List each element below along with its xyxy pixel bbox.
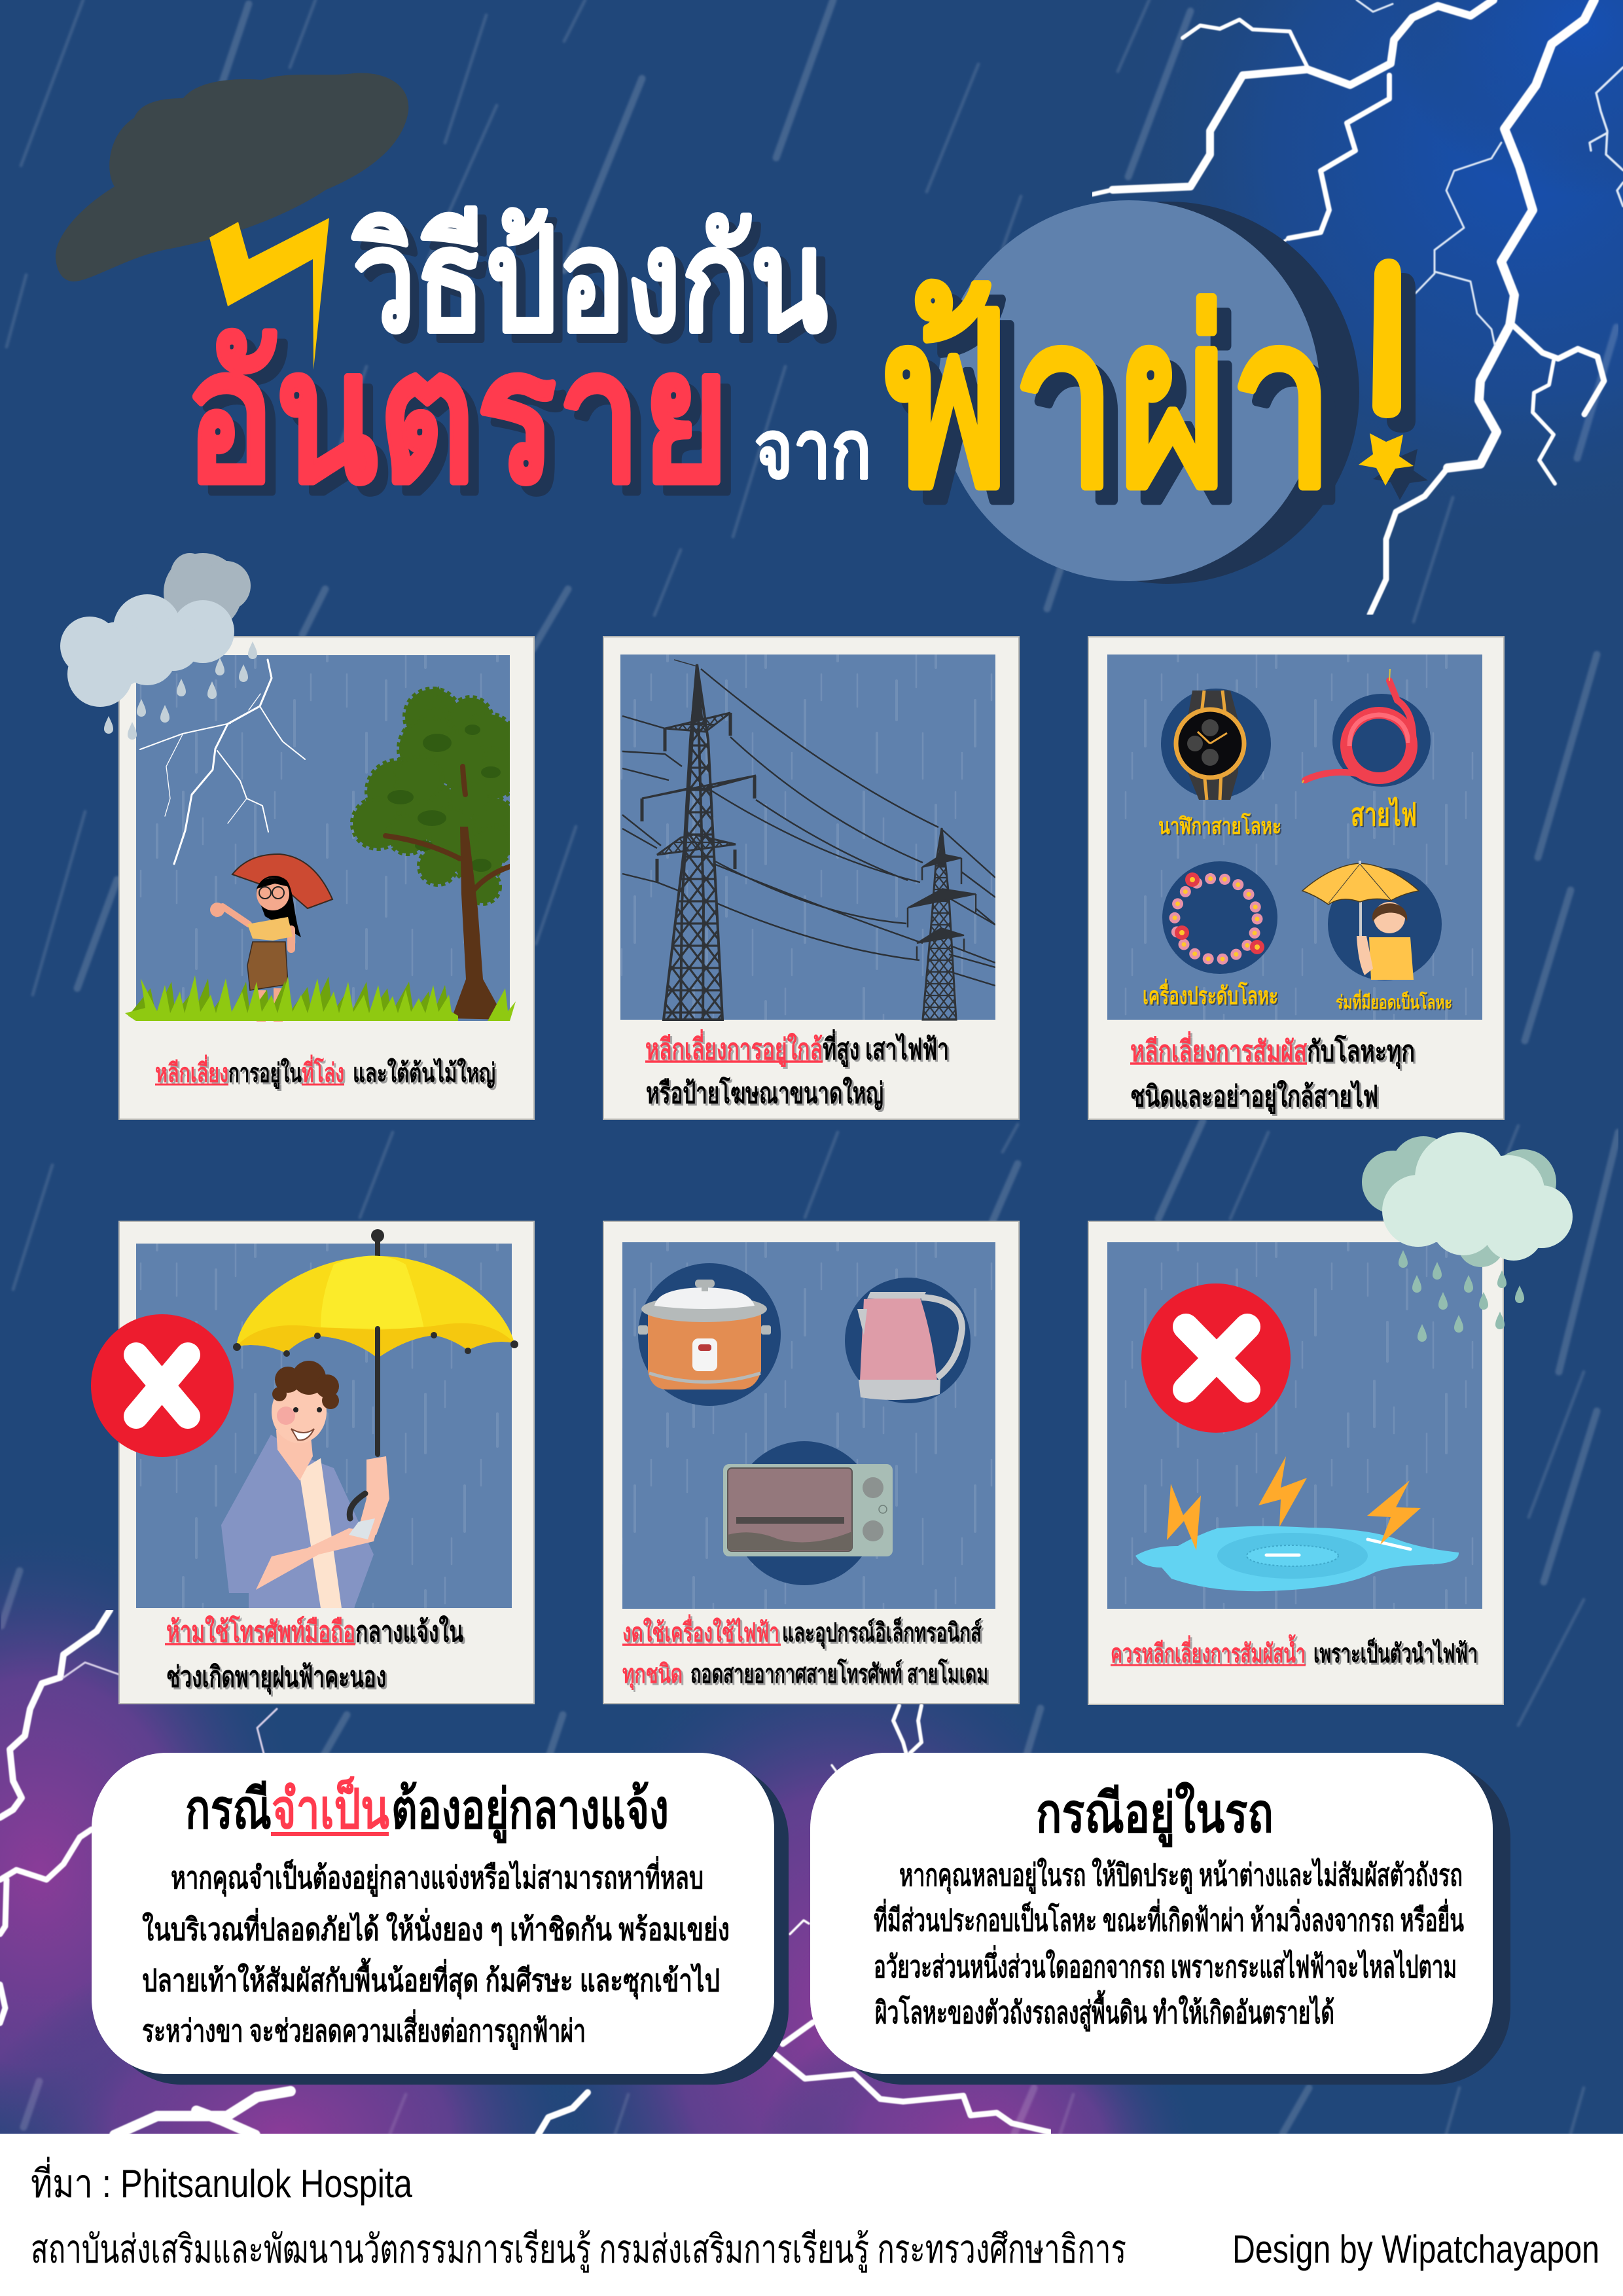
caption: ทุกชนิด	[622, 1660, 683, 1691]
caption: หลีกเลี่ยงการอยู่ใกล้	[645, 1029, 823, 1067]
label: ร่มที่มียอดเป็นโลหะ	[1336, 989, 1452, 1013]
card heading: กรณีอยู่ในรถ	[1036, 1782, 1274, 1848]
lightning bolt icon	[209, 218, 329, 370]
caption	[165, 1614, 463, 1695]
caption: และใต้ต้นไม้ใหญ่	[353, 1058, 495, 1088]
source line: ที่มา : Phitsanulok Hospita	[31, 2157, 413, 2206]
title line: yellow: ฟ้าผ่า	[877, 267, 1335, 537]
icon: red prohibition cross	[91, 1314, 234, 1457]
card text: ปลายเท้าให้สัมผัสกับพื้นน้อยที่สุด ก้มศีรษะ และซุกเข้าไป	[142, 1958, 720, 2000]
panel: avoid open fields and big trees	[60, 553, 534, 1119]
illustration: grass	[125, 975, 516, 1021]
caption: กับโลหะทุก	[1307, 1033, 1415, 1069]
title line: white: วิธีป้องกัน	[352, 200, 828, 361]
card text: หากคุณจำเป็นต้องอยู่กลางแจ่งหรือไม่สามารถหาที่หลบ	[171, 1856, 704, 1897]
caption: ที่สูง เสาไฟฟ้า	[823, 1029, 949, 1067]
icon: umbrella with metal tip	[1302, 861, 1442, 980]
caption: หลีกเลี่ยง	[155, 1054, 228, 1088]
icon: electric wire	[1302, 669, 1431, 787]
card text	[142, 1856, 730, 2051]
caption: ชนิดและอย่าอยู่ใกล้สายไฟ	[1130, 1079, 1378, 1114]
caption: ถอดสายอากาศสายโทรศัพท์ สายโมเดม	[690, 1659, 988, 1689]
caption: หลีกเลี่ยงการสัมผัส	[1130, 1031, 1307, 1067]
illustration: yellow umbrella	[233, 1229, 518, 1454]
panel: no mobile phone use	[91, 1221, 534, 1704]
icon: lightning sparks	[1167, 1456, 1421, 1551]
illustration: man with phone	[221, 1361, 389, 1608]
storm cloud	[56, 73, 408, 281]
caption: ที่โล่ง	[302, 1054, 344, 1088]
illustration: large pylon	[642, 660, 756, 1020]
label: เครื่องประดับโลหะ	[1143, 978, 1278, 1009]
illustration: puddle	[1135, 1526, 1459, 1591]
illustration: power lines	[622, 669, 995, 986]
icon: rain cloud	[60, 553, 257, 740]
illustration: lightning	[140, 660, 305, 864]
panel: avoid contact with metal	[1088, 637, 1504, 1119]
circle behind title	[938, 200, 1359, 584]
icon: metal watch	[1161, 689, 1271, 800]
lightning top right	[1092, 0, 1623, 615]
footer	[0, 2134, 1623, 2296]
caption	[622, 1614, 988, 1691]
card text: ระหว่างขา จะช่วยลดความเสี่ยงต่อการถูกฟ้าผ่า	[142, 2009, 586, 2051]
panel: stop using electrical appliances	[603, 1221, 1019, 1704]
exclamation mark with star	[1359, 259, 1414, 486]
caption: กลางแจ้งใน	[355, 1615, 463, 1648]
card heading	[185, 1776, 669, 1844]
title	[185, 200, 1414, 584]
panel: avoid contact with water	[1088, 1132, 1573, 1704]
caption: การอยู่ใน	[228, 1058, 302, 1089]
caption: เพราะเป็นตัวนำไฟฟ้า	[1313, 1637, 1478, 1668]
caption: ช่วงเกิดพายุฝนฟ้าคะนอง	[166, 1661, 386, 1695]
card heading: จำเป็น	[272, 1776, 389, 1840]
icon: rice cooker	[638, 1263, 781, 1406]
card text	[874, 1857, 1464, 2032]
caption	[1130, 1031, 1415, 1114]
label: สายไฟ	[1351, 796, 1417, 833]
card text: ผิวโลหะของตัวถังรถลงสู่พื้นดิน ทำให้เกิดอันตรายได้	[875, 1990, 1334, 2032]
caption: ควรหลีกเลี่ยงการสัมผัสน้ำ	[1111, 1634, 1306, 1668]
card heading: ต้องอยู่กลางแจ้ง	[391, 1778, 669, 1844]
icon: electric kettle	[845, 1278, 971, 1403]
lightning bottom	[0, 1610, 1051, 2135]
icon: toaster oven	[723, 1441, 893, 1585]
illustration: woman with umbrella	[210, 854, 332, 1022]
card heading: กรณี	[185, 1778, 272, 1840]
card: outdoors case	[92, 1753, 789, 2085]
panel: avoid high places and pylons	[603, 637, 1019, 1119]
icon: rain cloud	[1362, 1132, 1573, 1342]
icon: red prohibition cross	[1141, 1283, 1291, 1433]
icon: metal necklace	[1162, 861, 1277, 974]
card text: ในบริเวณที่ปลอดภัยได้ ให้นั่งยอง ๆ เท้าชิดกัน พร้อมเขย่ง	[142, 1907, 730, 1946]
caption: หรือป้ายโฆษณาขนาดใหญ่	[646, 1075, 883, 1110]
illustration: tree	[353, 689, 518, 1020]
caption: และอุปกรณ์อิเล็กทรอนิกส์	[782, 1616, 982, 1649]
caption: ห้ามใช้โทรศัพท์มือถือ	[166, 1614, 355, 1648]
caption	[1111, 1634, 1478, 1668]
title line: red: อันตราย	[185, 313, 730, 521]
caption	[645, 1029, 949, 1110]
caption: งดใช้เครื่องใช้ไฟฟ้า	[622, 1614, 779, 1647]
illustration: small pylon	[908, 828, 976, 1020]
caption	[155, 1054, 495, 1089]
card: in a car case	[810, 1753, 1510, 2085]
label: นาฬิกาสายโลหะ	[1158, 812, 1281, 839]
title word: from: จาก	[754, 404, 872, 495]
institution line: สถาบันส่งเสริมและพัฒนานวัตกรรมการเรียนรู้ กรมส่งเสริมการเรียนรู้ กระทรวงศึกษาธิการ	[31, 2227, 1126, 2273]
